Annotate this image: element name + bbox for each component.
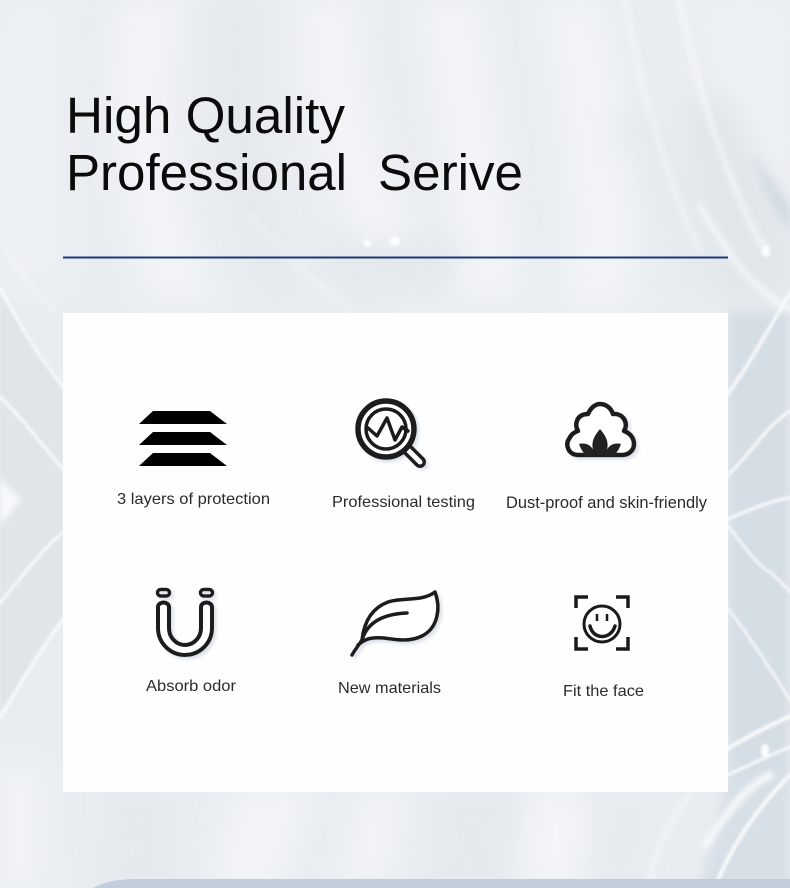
- icon: three layers: [139, 411, 227, 466]
- white filaments: [0, 285, 790, 880]
- label: New materials: New materials: [338, 680, 441, 697]
- droplets: [363, 236, 770, 758]
- left side panels: [0, 295, 63, 717]
- icon: leaf: [352, 592, 438, 655]
- panel: features: [63, 313, 728, 792]
- label: 3 layers of protection: 3 layers of protection: [117, 491, 270, 508]
- divider line: [63, 256, 728, 258]
- title: Professional: [66, 144, 347, 201]
- label: Absorb odor: Absorb odor: [146, 678, 237, 695]
- icon: magnifier testing: [358, 401, 420, 462]
- title: Serive: [378, 144, 523, 201]
- right side panels: [728, 310, 790, 790]
- icon: magnet: [158, 590, 212, 655]
- label: Professional testing: Professional testing: [332, 494, 475, 511]
- label: Fit the face: Fit the face: [563, 683, 644, 700]
- bottom blue strip: [93, 879, 790, 888]
- label: Dust-proof and skin-friendly: Dust-proof and skin-friendly: [506, 494, 708, 512]
- title: High Quality: [66, 87, 345, 144]
- icon: face scan smiley: [576, 597, 628, 649]
- icon: cotton: [567, 404, 634, 457]
- title: [66, 87, 523, 201]
